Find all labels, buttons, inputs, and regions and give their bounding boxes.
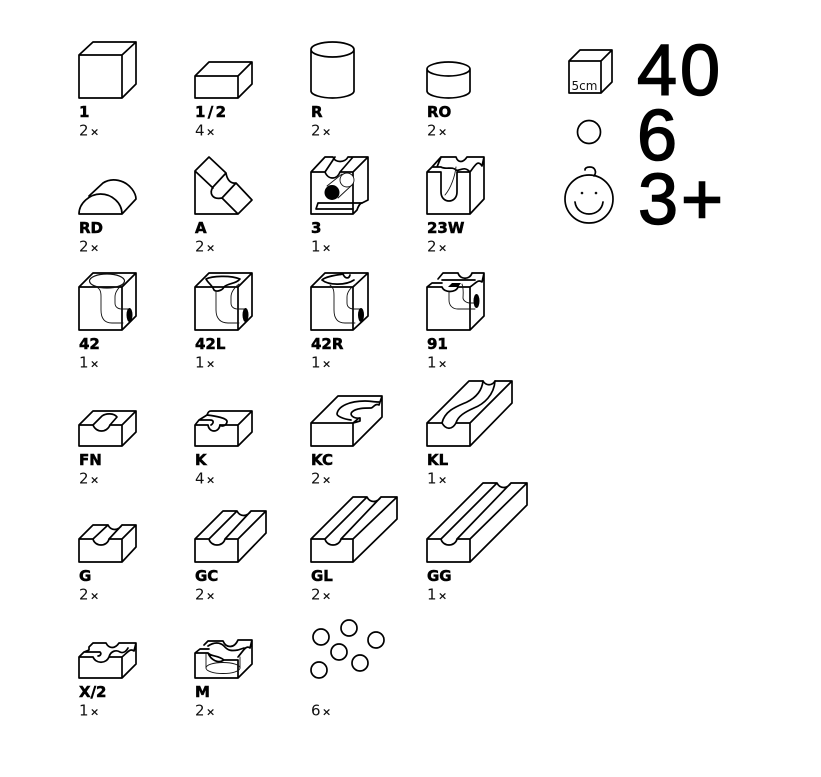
- piece: GC: 2×: [195, 586, 215, 604]
- piece: X/2: 1×: [79, 702, 99, 720]
- piece: 1/2: 1/2: [195, 103, 226, 121]
- piece: 1: [79, 42, 136, 140]
- piece: 42: 1×: [79, 354, 99, 372]
- piece: KL: [427, 381, 512, 488]
- piece: 42: [79, 273, 136, 372]
- piece: R: [311, 42, 354, 140]
- piece: RO: RO: [427, 103, 451, 121]
- piece: GG: GG: [427, 567, 452, 585]
- piece: A: [195, 157, 252, 256]
- piece: 42L: [195, 273, 252, 372]
- stat: 40 cubes of 5cm: 5cm: [572, 79, 597, 93]
- piece: RD: RD: [79, 219, 103, 237]
- piece: KL: KL: [427, 451, 449, 469]
- piece: K: 4×: [195, 470, 215, 488]
- piece: 23W: 23W: [427, 219, 465, 237]
- piece: balls: 6×: [311, 702, 331, 720]
- piece: 3: 3: [311, 219, 321, 237]
- piece: GC: GC: [195, 567, 218, 585]
- piece: GL: 2×: [311, 586, 331, 604]
- piece: balls: [311, 620, 384, 720]
- piece: A: A: [195, 219, 207, 237]
- piece: FN: FN: [79, 451, 102, 469]
- piece: 1: 1: [79, 103, 89, 121]
- piece: GL: GL: [311, 567, 333, 585]
- piece: 91: 91: [427, 335, 448, 353]
- piece: K: [195, 411, 252, 488]
- piece: M: M: [195, 683, 210, 701]
- piece: K: K: [195, 451, 208, 469]
- piece: KC: KC: [311, 451, 333, 469]
- piece: RD: [79, 180, 136, 256]
- piece: 23W: [427, 157, 484, 256]
- piece: GC: [195, 511, 266, 604]
- piece: 1/2: 4×: [195, 122, 215, 140]
- piece: RO: [427, 62, 470, 140]
- piece: GG: [427, 483, 527, 604]
- piece: 42R: 42R: [311, 335, 344, 353]
- piece: X/2: X/2: [79, 683, 106, 701]
- piece: 91: 1×: [427, 354, 447, 372]
- piece: GG: 1×: [427, 586, 447, 604]
- stat: 6 balls: 6: [637, 96, 680, 176]
- piece: 1: 2×: [79, 122, 99, 140]
- piece: KC: 2×: [311, 470, 331, 488]
- piece: R: R: [311, 103, 323, 121]
- piece: R: 2×: [311, 122, 331, 140]
- piece: 42L: 42L: [195, 335, 226, 353]
- piece: 91: [427, 273, 484, 372]
- piece: G: 2×: [79, 586, 99, 604]
- piece: 3: 1×: [311, 238, 331, 256]
- piece: M: 2×: [195, 702, 215, 720]
- piece: 1/2: [195, 62, 252, 140]
- piece: 42R: 1×: [311, 354, 331, 372]
- stat: age 3+: 3+: [638, 160, 726, 240]
- piece: 42L: 1×: [195, 354, 215, 372]
- piece: KC: [311, 396, 382, 488]
- piece: X/2: [79, 643, 136, 720]
- piece: FN: 2×: [79, 470, 99, 488]
- piece: 23W: 2×: [427, 238, 447, 256]
- piece: RD: 2×: [79, 238, 99, 256]
- piece: G: G: [79, 567, 91, 585]
- piece: 3: [311, 157, 368, 256]
- piece: M: [195, 640, 252, 720]
- stat: 40 cubes of 5cm: 40: [637, 31, 723, 111]
- piece: 42: 42: [79, 335, 100, 353]
- piece: A: 2×: [195, 238, 215, 256]
- stat: 40 cubes of 5cm: [569, 31, 723, 111]
- piece: KL: 1×: [427, 470, 447, 488]
- piece: RO: 2×: [427, 122, 447, 140]
- piece: FN: [79, 411, 136, 488]
- stat: age 3+: [565, 160, 726, 240]
- piece: GL: [311, 497, 397, 604]
- piece: G: [79, 525, 136, 604]
- stat: 6 balls: [578, 96, 680, 176]
- piece: 42R: [311, 273, 368, 372]
